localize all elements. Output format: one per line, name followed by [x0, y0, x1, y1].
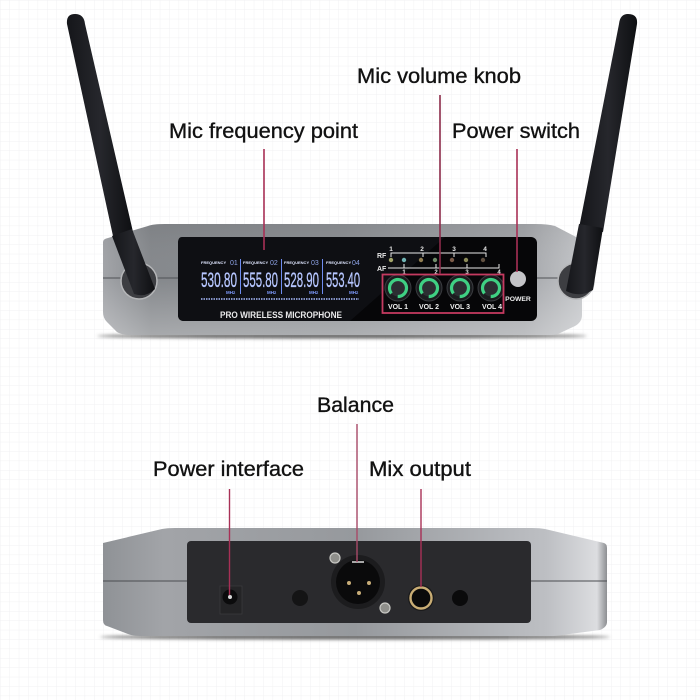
label: power interface: Power interface: [153, 458, 304, 481]
AF indicators: 4: [497, 270, 501, 276]
RF indicators: [377, 246, 487, 262]
AF indicators: 1: [402, 270, 406, 276]
label: mix output: Mix output: [369, 458, 471, 481]
channel 1 frequency: 01: [230, 260, 238, 267]
screw bottom: [380, 603, 390, 613]
channel 4 frequency: MHz: [349, 290, 359, 295]
AF indicators: AF: [377, 266, 387, 273]
RF indicators: 1: [389, 246, 393, 253]
channel 4 frequency: FREQUENCY: [326, 260, 351, 265]
channel 2 frequency: 555.80: [243, 269, 278, 292]
RF indicators: 3: [452, 246, 456, 253]
leader line: balance: [356, 424, 358, 562]
channel 1 frequency: FREQUENCY: [201, 260, 226, 265]
unlabelled port: [292, 590, 308, 606]
volume knob 3: VOL 3: [450, 304, 470, 311]
leader line: mix output: [420, 489, 422, 587]
RF indicators: 2: [420, 246, 424, 253]
RF indicators: 4: [483, 246, 487, 253]
right antenna: [558, 14, 637, 299]
channel 4 frequency: [326, 260, 360, 295]
body seam: [103, 277, 582, 279]
leader line: volume knob: [439, 95, 441, 274]
channel 4 frequency: 553.40: [326, 269, 360, 292]
back view receiver: [100, 528, 610, 640]
channel 2 frequency: [243, 260, 278, 295]
channel 3 frequency: 528.90: [284, 269, 319, 292]
volume knob highlight box: [382, 274, 504, 313]
channel 2 frequency: MHz: [267, 290, 277, 295]
volume knob 4: VOL 4: [482, 304, 502, 311]
power button: POWER: [505, 296, 531, 303]
channel 3 frequency: [284, 260, 319, 295]
screw top: [330, 553, 340, 563]
label: mic volume knob: Mic volume knob: [357, 65, 521, 88]
label: balance: Balance: [317, 394, 394, 417]
XLR balance connector: [331, 555, 385, 609]
leader line: power switch: [516, 149, 518, 272]
front view receiver: [67, 14, 637, 338]
body seam: [103, 580, 607, 582]
mix output jack: [408, 585, 434, 611]
display panel: [178, 237, 537, 321]
AF indicators: 2: [434, 270, 438, 276]
channel 3 frequency: FREQUENCY: [284, 260, 309, 265]
leader line: frequency: [263, 149, 265, 250]
power jack: [220, 586, 242, 614]
channel 2 frequency: 02: [270, 260, 278, 267]
channel 1 frequency: MHz: [226, 290, 236, 295]
volume knob 1: [385, 275, 411, 311]
channel 1 frequency: 530.80: [201, 269, 237, 292]
rear panel: [187, 541, 531, 623]
front receiver body: [103, 224, 582, 335]
power button: [505, 271, 531, 303]
volume knob 4: [478, 275, 504, 311]
volume knob 1: VOL 1: [388, 304, 408, 311]
AF indicators: [377, 264, 501, 276]
channel 3 frequency: MHz: [309, 290, 319, 295]
leader line: power interface: [228, 489, 230, 595]
volume knob 2: VOL 2: [419, 304, 439, 311]
channel 1 frequency: [201, 260, 238, 295]
label: power switch: Power switch: [452, 120, 580, 143]
RF indicators: RF: [377, 253, 387, 260]
brand text: PRO WIRELESS MICROPHONE: [220, 310, 342, 321]
round hole: [452, 590, 468, 606]
channel 4 frequency: 04: [352, 260, 360, 267]
volume knob 2: [416, 275, 442, 311]
left antenna: [67, 14, 157, 299]
label: mic frequency point: Mic frequency point: [169, 120, 358, 143]
AF indicators: 3: [465, 270, 469, 276]
back receiver body: [103, 528, 607, 636]
volume knob 3: [447, 275, 473, 311]
channel 3 frequency: 03: [311, 260, 319, 267]
channel 2 frequency: FREQUENCY: [243, 260, 268, 265]
